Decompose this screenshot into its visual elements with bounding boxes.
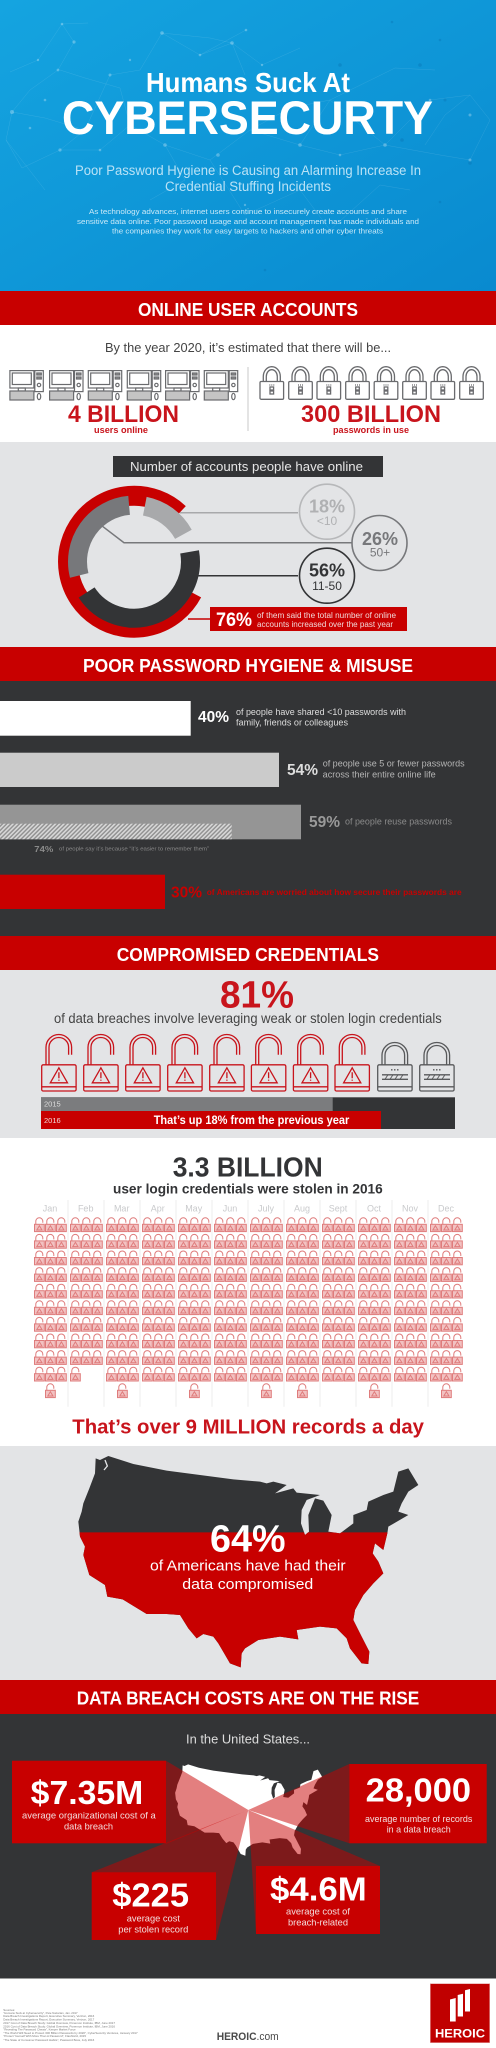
- stat: 64%: [150, 1519, 346, 1593]
- month labels: Sept: [329, 1204, 348, 1214]
- callout: 26% 50+: [352, 516, 407, 570]
- stat: 81%: [54, 975, 442, 1026]
- month labels: Dec: [438, 1204, 454, 1214]
- callout: 18% under 10: <10: [317, 514, 338, 528]
- bar: 59% reuse passwords: 59%: [309, 814, 340, 831]
- stat box: $4.6M: breach-related: [288, 1917, 348, 1928]
- chart: 2015 vs 2016 bars: 2016: [44, 1116, 61, 1125]
- callout: 18% under 10: 18%: [309, 497, 345, 517]
- subtitle: Credential Stuffing Incidents: [165, 179, 331, 194]
- bar: 40% shared passwords: [0, 701, 406, 736]
- month labels: May: [185, 1204, 203, 1214]
- stat box: 28,000: [349, 1764, 487, 1843]
- heading: online user accounts: [0, 291, 496, 325]
- stat: 3.3 billion: [113, 1152, 383, 1196]
- text: sources: "Revealing The Password Cheats", Keeper Market Force: [3, 2028, 76, 2032]
- title: [62, 67, 433, 144]
- stat: 64%: 64%: [210, 1519, 286, 1561]
- callout: 76% increased: [210, 607, 407, 631]
- stat box: $225: average cost: [127, 1913, 180, 1924]
- callout: 56% 11-50: [300, 548, 354, 603]
- month labels: Aug: [294, 1204, 310, 1214]
- subtitle: [75, 163, 421, 194]
- stat box: $4.6M: $4.6M: [270, 1871, 367, 1908]
- text: sources: "The State of Consumer Password Habits", Password Boss, July 2016: [3, 2038, 95, 2042]
- bar: 40% shared passwords: of people have shared <10 passwords with: [236, 707, 406, 717]
- bar: 54% five or fewer passwords: 54%: [287, 762, 318, 779]
- month labels: Jun: [223, 1204, 237, 1214]
- panel: 3.3 billion stolen: [0, 1138, 496, 1446]
- logo: heroic: [430, 1984, 490, 2043]
- stat box: $7.35M: average organizational cost of a: [22, 1811, 156, 1822]
- callout: 76% increased: of them said the total number of online: [257, 611, 397, 620]
- stat box: 28,000: in a data breach: [387, 1825, 451, 1836]
- text: sources: Data Breach Investigations Report, Executive Summary, Verizon, 2016: [3, 2014, 95, 2018]
- month labels: Nov: [402, 1204, 418, 1214]
- text: sources: [3, 2008, 138, 2042]
- month labels: Mar: [114, 1204, 129, 1214]
- stat box: $225: [92, 1872, 216, 1940]
- chart: 2015 vs 2016 bars: 2015: [44, 1100, 61, 1109]
- text: sources: "Humans Suck at Cybersecurity", Pete Nazarian, Jan. 2017: [3, 2011, 78, 2015]
- icons: computers: [10, 371, 238, 400]
- stat box: $225: per stolen record: [118, 1924, 188, 1935]
- stat box: $4.6M: average cost of: [286, 1906, 350, 1917]
- stat box: $4.6M: [256, 1866, 380, 1934]
- subtitle: Poor Password Hygiene is Causing an Alarming Increase In: [75, 163, 421, 178]
- intro text: As technology advances, internet users continue to insecurely create accounts and share: [89, 207, 407, 216]
- text: sources: "Protect Yourself With More Than A Password", FlashGrid, 2015: [3, 2034, 86, 2038]
- panel: data breach costs: [0, 1714, 496, 1978]
- stat: 81%: of data breaches involve leveraging weak or stolen login credentials: [54, 1011, 442, 1026]
- heading: number of accounts people have online: Number of accounts people have online: [130, 459, 363, 474]
- intro text: sensitive data online. Poor password usage and account management has made individuals and: [77, 217, 419, 226]
- chart: US map: [78, 1456, 418, 1667]
- heading: compromised credentials: [0, 936, 496, 970]
- month labels: July: [258, 1204, 274, 1214]
- month labels: Oct: [367, 1204, 381, 1214]
- bar: 40% shared passwords: 40%: [198, 709, 229, 726]
- callout: 76% increased: accounts increased over the past year: [257, 620, 393, 629]
- bar: 59% reuse passwords: 74%: [34, 845, 53, 854]
- heading: poor password hygiene: POOR PASSWORD HYGIENE & MISUSE: [83, 656, 413, 676]
- stat box: 28,000: 28,000: [366, 1772, 471, 1809]
- title: Humans Suck At: [146, 67, 350, 98]
- callout: 56% 11-50: 11-50: [312, 579, 342, 593]
- month labels: Feb: [78, 1204, 93, 1214]
- stat box: $225: $225: [112, 1877, 189, 1914]
- callout: 76% increased: 76%: [216, 610, 252, 631]
- intro text: the companies they work for easy targets to hackers and other cyber threats: [112, 226, 383, 236]
- bar: 59% reuse passwords: [0, 805, 452, 854]
- text: in the United States: In the United States...: [186, 1731, 310, 1746]
- heading: poor password hygiene: [0, 647, 496, 681]
- chart: US map with wedges: [92, 1761, 380, 1940]
- bar: 54% five or fewer passwords: across their entire online life: [323, 769, 436, 779]
- heading: online user accounts: ONLINE USER ACCOUNTS: [138, 300, 358, 320]
- heading: data breach costs: DATA BREACH COSTS ARE ON THE RISE: [77, 1688, 419, 1708]
- callout: 56% 11-50: 56%: [309, 561, 345, 581]
- heading: data breach costs: [0, 1680, 496, 1714]
- text: sources: 2016 Cost of Data Breach Study: Global Overview, Ponemon Institute, IBM, June 2016: [3, 2024, 115, 2028]
- text: sources: 2017 Cost of Data Breach Study: Global Overview, Ponemon Institute, IBM, June 2017: [3, 2021, 115, 2025]
- text: heroic.com: HEROIC.com: [217, 2031, 279, 2043]
- stat box: $7.35M: [12, 1761, 166, 1843]
- text: sources: "The World Will Need to Protect 300 Billion Passwords by 2020", CyberSecurity Ventures, January 2017: [3, 2031, 138, 2035]
- icons: broken locks: [42, 1034, 454, 1091]
- stat: 3.3 billion: 3.3 BILLION: [173, 1152, 323, 1183]
- bar: 30% worried: 30%: [171, 884, 202, 901]
- panel: 2020 estimates: [0, 325, 496, 442]
- panel: password misuse bars: [0, 681, 496, 936]
- title: CYBERSECURTY: [62, 91, 433, 144]
- stat: 81%: 81%: [220, 975, 294, 1017]
- panel: compromised credentials: [0, 970, 496, 1138]
- callout: 26% 50+: 50+: [370, 546, 390, 560]
- bar: 30% worried: [0, 875, 462, 909]
- text: sources: Data Breach Investigations Report, Executive Summary, Verizon, 2017: [3, 2018, 95, 2022]
- bar: 59% reuse passwords: of people reuse passwords: [345, 816, 452, 826]
- bar: 54% five or fewer passwords: [0, 753, 465, 787]
- callout: 26% 50+: 26%: [362, 529, 398, 549]
- bar: 40% shared passwords: family, friends or colleagues: [236, 717, 348, 727]
- callout: 18% under 10: [300, 484, 354, 539]
- logo: heroic: HEROIC: [435, 2028, 485, 2040]
- stat: 300 billion passwords in use: 300 BILLION: [301, 401, 441, 428]
- stat: 4 billion users online: users online: [94, 425, 148, 435]
- bar: 30% worried: of Americans are worried about how secure their passwords are: [207, 887, 462, 897]
- intro text: [77, 207, 419, 236]
- text: sources: Sources:: [3, 2008, 15, 2012]
- month labels: Jan: [43, 1204, 57, 1214]
- heading: number of accounts people have online: [113, 456, 383, 477]
- panel: footer: [0, 1978, 496, 2048]
- bar: 59% reuse passwords: of people say it’s because “it’s easier to remember them”: [59, 847, 209, 853]
- chart: 2015 vs 2016 bars: That’s up 18% from the previous year: [154, 1115, 350, 1127]
- panel: 64% of Americans: [0, 1446, 496, 1680]
- stat box: 28,000: average number of records: [365, 1814, 473, 1825]
- stat box: $7.35M: $7.35M: [31, 1774, 143, 1811]
- month labels: Apr: [151, 1204, 165, 1214]
- stat: 3.3 billion: user login credentials were stolen in 2016: [113, 1180, 383, 1196]
- text: by the year 2020: By the year 2020, it’s estimated that there will be...: [105, 340, 391, 355]
- icons: padlocks: [260, 367, 483, 399]
- heading: compromised credentials: COMPROMISED CREDENTIALS: [117, 945, 379, 965]
- stat: 64%: data compromised: [182, 1576, 313, 1593]
- panel: header: [0, 0, 496, 291]
- chart: lock pictogram grid: [34, 1218, 462, 1398]
- stat: 300 billion passwords in use: passwords in use: [333, 425, 409, 435]
- stat: 64%: of Americans have had their: [150, 1558, 346, 1575]
- month labels: [43, 1204, 454, 1214]
- chart: donut: [68, 496, 352, 628]
- bar: 54% five or fewer passwords: of people use 5 or fewer passwords: [323, 759, 465, 769]
- panel: number of accounts: [0, 442, 496, 647]
- stat: 4 billion users online: 4 BILLION: [68, 401, 179, 428]
- stat box: $7.35M: data breach: [64, 1822, 113, 1833]
- chart: 2015 vs 2016 bars: [41, 1097, 455, 1129]
- text: 9 million records a day: That’s over 9 MILLION records a day: [72, 1416, 425, 1438]
- background network pattern: [6, 21, 490, 271]
